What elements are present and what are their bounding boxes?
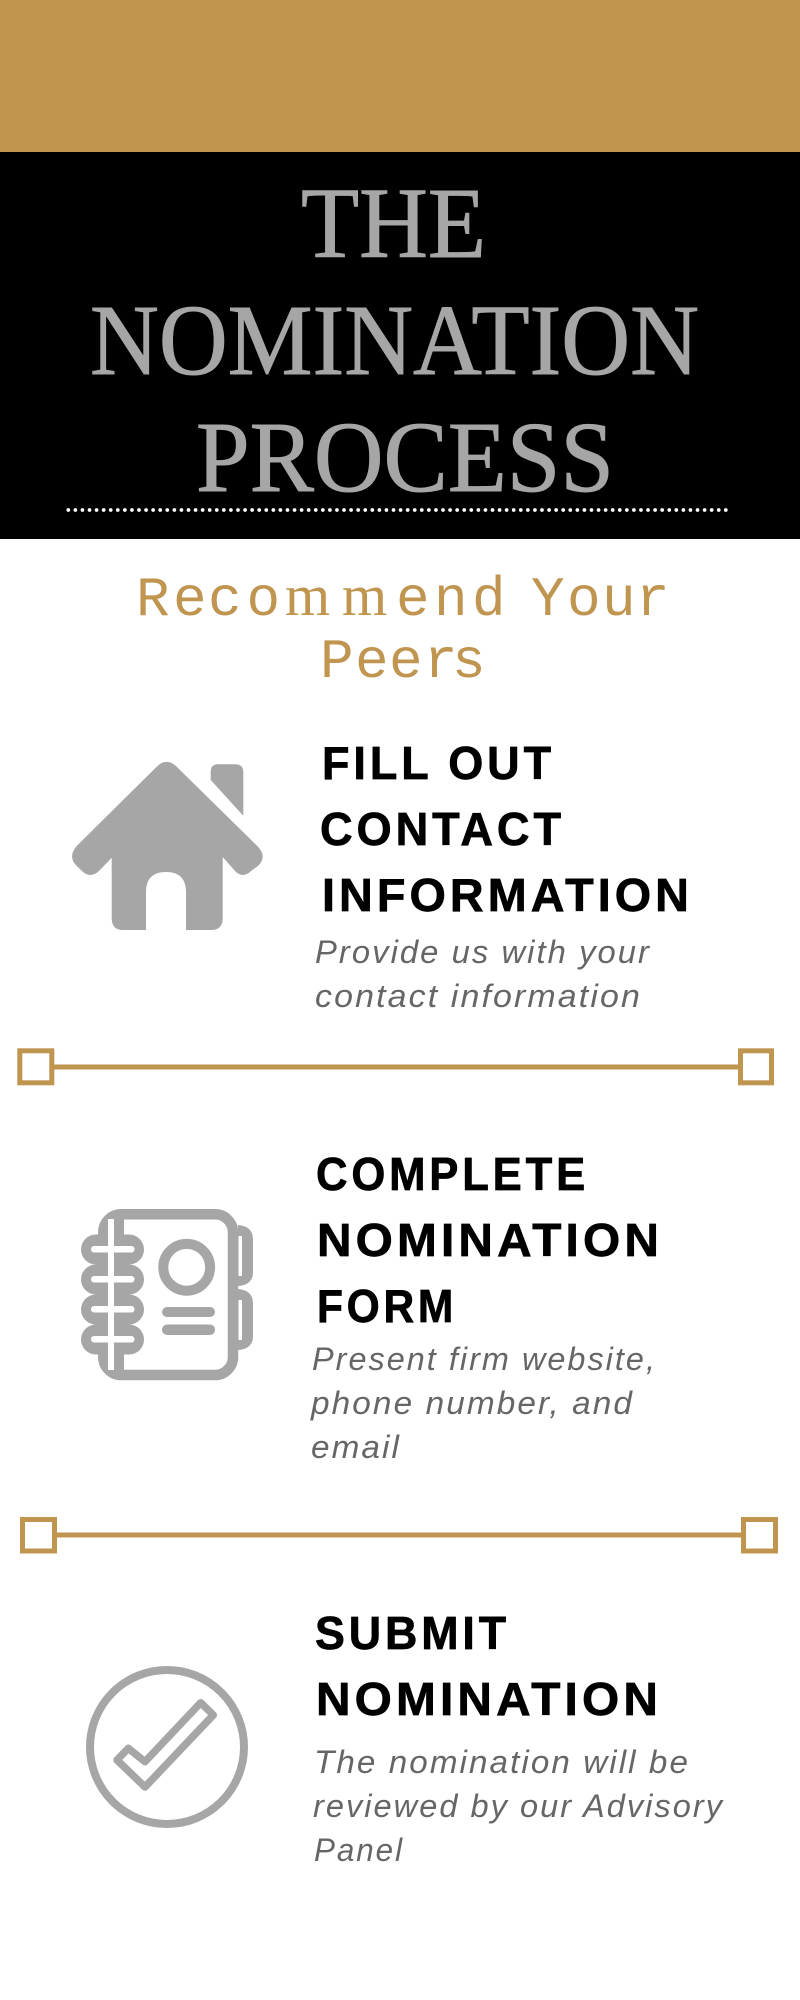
description: step 3: reviewed by our Advisory <box>313 1788 724 1824</box>
description: step 3 <box>313 1744 724 1868</box>
description: step 1: Provide us with your <box>315 934 651 970</box>
subtitle <box>136 563 670 694</box>
heading: submit nomination <box>315 1607 662 1725</box>
description: step 1: contact information <box>315 978 642 1014</box>
icon: house <box>72 762 263 930</box>
heading: complete nomination form: COMPLETE <box>316 1148 589 1200</box>
divider 1 <box>20 1051 772 1083</box>
heading: fill out contact information: INFORMATION <box>322 869 693 921</box>
description: step 2: Present firm website, <box>312 1341 657 1377</box>
divider 2 <box>22 1520 776 1551</box>
dotted rule <box>68 508 728 512</box>
panel: title banner <box>0 152 800 539</box>
heading: complete nomination form: FORM <box>317 1280 457 1332</box>
heading: fill out contact information: CONTACT <box>320 803 565 855</box>
description: step 3: The nomination will be <box>314 1744 690 1780</box>
title: PROCESS <box>196 401 614 513</box>
icon: check mark in circle <box>90 1670 244 1824</box>
subtitle: Peers <box>320 630 486 694</box>
description: step 2 <box>310 1341 657 1465</box>
title: NOMINATION <box>90 284 699 396</box>
heading: complete nomination form <box>316 1148 663 1332</box>
panel: step 1 <box>72 737 693 1014</box>
heading: fill out contact information <box>320 737 693 921</box>
heading: submit nomination: SUBMIT <box>315 1607 510 1659</box>
heading: fill out contact information: FILL OUT <box>322 737 555 789</box>
heading: complete nomination form: NOMINATION <box>317 1214 663 1266</box>
heading: submit nomination: NOMINATION <box>316 1673 662 1725</box>
description: step 2: phone number, and <box>310 1385 634 1421</box>
subtitle: Recommend Your <box>136 563 670 632</box>
title: THE <box>301 167 486 279</box>
description: step 1 <box>315 934 651 1014</box>
title <box>90 167 699 513</box>
panel: step 2 <box>81 1148 663 1465</box>
panel: step 3 <box>90 1607 724 1868</box>
gold top band <box>0 0 800 152</box>
description: step 2: email <box>311 1429 401 1465</box>
description: step 3: Panel <box>314 1832 404 1868</box>
icon: notebook <box>81 1214 253 1375</box>
